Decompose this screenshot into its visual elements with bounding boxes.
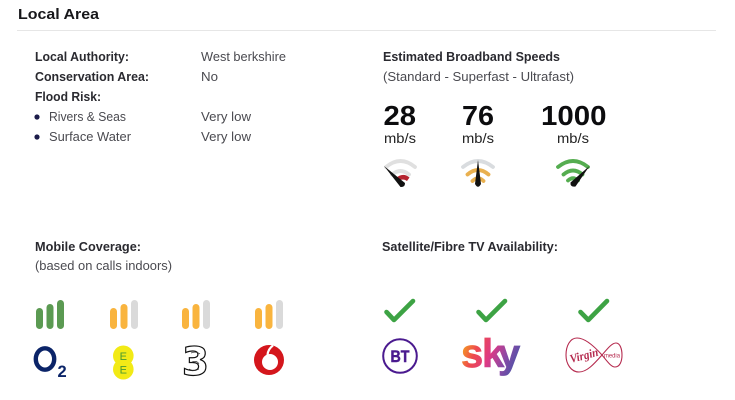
local authority row: West berkshire xyxy=(201,50,286,64)
icon: gauge green xyxy=(558,161,590,187)
local authority row: Local Authority: xyxy=(35,50,129,64)
conservation area row: Conservation Area: xyxy=(35,70,149,84)
logo: Virgin Media: Virgin xyxy=(568,345,600,366)
speed: ultrafast: 1000 xyxy=(541,100,606,131)
logo: BT: BT xyxy=(390,348,410,366)
conservation area row xyxy=(35,70,218,84)
rivers and seas row: Very low xyxy=(201,110,252,124)
speed: ultrafast xyxy=(541,100,606,146)
logo: Virgin Media xyxy=(566,338,622,372)
logo: O2: 2 xyxy=(58,363,67,381)
logo: BT xyxy=(383,339,417,373)
logo: Vodafone xyxy=(254,345,284,375)
local authority row xyxy=(35,50,286,64)
logo: Three: 3 xyxy=(182,340,209,385)
icon: gauge amber xyxy=(463,160,493,187)
flood risk heading: Flood Risk: xyxy=(35,90,101,104)
mobile coverage note: (based on calls indoors) xyxy=(35,259,172,273)
panel: tv availability xyxy=(382,240,622,376)
logo: EE: E xyxy=(120,364,127,376)
icon: check BT xyxy=(386,301,413,320)
broadband heading: Estimated Broadband Speeds xyxy=(383,50,560,64)
speed: superfast: mb/s xyxy=(462,131,494,146)
logo: EE: E xyxy=(120,351,127,363)
mobile coverage heading: Mobile Coverage: xyxy=(35,240,141,254)
speed: superfast: 76 xyxy=(462,100,494,131)
speed: standard: 28 xyxy=(384,100,416,131)
surface water row: Surface Water xyxy=(49,130,131,144)
tv availability heading: Satellite/Fibre TV Availability: xyxy=(382,240,558,254)
panel: property details xyxy=(34,50,286,144)
signal bars: Three xyxy=(186,304,206,326)
conservation area row: No xyxy=(201,70,218,84)
logo: Sky: sky xyxy=(461,332,521,376)
broadband subheading: (Standard - Superfast - Ultrafast) xyxy=(383,70,574,84)
surface water row: Very low xyxy=(201,130,252,144)
title: Local Area xyxy=(18,7,100,23)
signal bars: O2 xyxy=(40,304,60,326)
speed: standard xyxy=(384,100,416,146)
rivers and seas row xyxy=(34,110,252,124)
logo: O2 xyxy=(36,348,67,381)
surface water row xyxy=(34,130,252,144)
rivers and seas row: Rivers & Seas xyxy=(49,110,126,124)
icon: gauge red xyxy=(384,161,415,187)
logo: EE xyxy=(113,346,134,380)
signal bars: EE xyxy=(114,304,134,326)
icon: check Sky xyxy=(478,301,505,320)
speed: superfast xyxy=(462,100,494,146)
logo: Virgin Media: media xyxy=(604,352,620,360)
signal bars: Vodafone xyxy=(258,304,280,326)
icon: check Virgin xyxy=(580,301,607,320)
panel: broadband speeds xyxy=(383,50,606,187)
panel: mobile coverage xyxy=(35,240,284,385)
speed: standard: mb/s xyxy=(384,131,416,146)
speed: ultrafast: mb/s xyxy=(557,131,589,146)
